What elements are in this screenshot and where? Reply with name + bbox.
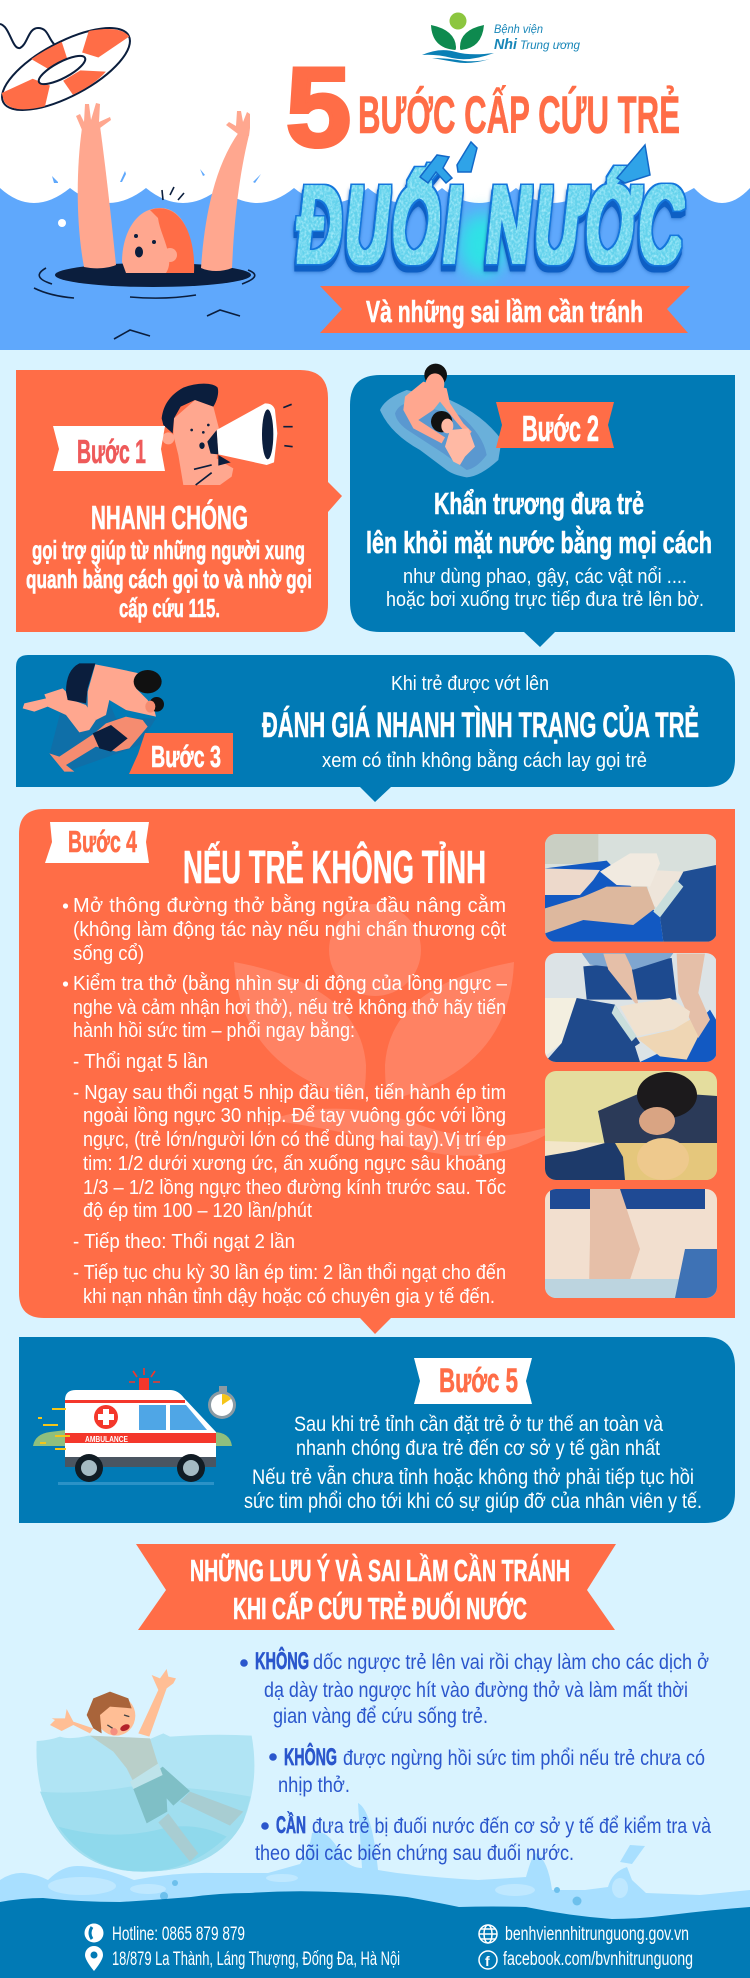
- step 4 instructions: ngực, (trẻ lớn/người lớn có thể dùng hai tay).Vị trí ép: [83, 1129, 506, 1151]
- step 4 instructions: (không làm động tác này nếu nghi chấn thương cột: [73, 919, 506, 941]
- ground: [58, 1482, 214, 1485]
- icon: facebook: f: [485, 1953, 490, 1969]
- panel background: [16, 655, 735, 802]
- panel: step 5: [19, 1337, 735, 1523]
- photo 2: airway check: [545, 953, 716, 1062]
- panel: step 3: [16, 655, 735, 802]
- note 2: [269, 1743, 705, 1797]
- step label: [129, 733, 233, 774]
- step 2 heading: [366, 486, 712, 560]
- illustration: rescuer and child in water: [380, 364, 502, 477]
- step 4 instructions: Mở thông đường thở bằng ngửa đầu nâng cằm: [73, 894, 506, 917]
- logo: Nhi: [494, 36, 518, 53]
- bushes: [33, 1430, 232, 1446]
- splash highlights: [48, 1874, 628, 1898]
- right hand: [226, 111, 250, 136]
- notes text: [240, 1647, 711, 1865]
- icon: facebook: [479, 1951, 497, 1969]
- panel: step 2: [350, 364, 735, 647]
- note 3: theo dõi các biến chứng sau đuối nước.: [255, 1842, 574, 1865]
- illustration: ambulance: [33, 1368, 236, 1485]
- step 4 instructions: khi nạn nhân tỉnh dậy hoặc có chuyên gia y tế đến.: [83, 1286, 495, 1308]
- stripes: [65, 1400, 185, 1403]
- icon: pin: [85, 1946, 103, 1971]
- speed lines: [38, 1409, 70, 1449]
- boy face: [107, 1715, 131, 1735]
- hair: [150, 208, 194, 273]
- panel background: [16, 370, 342, 632]
- title glow: [458, 213, 506, 277]
- step label: Bước 1: [77, 433, 146, 470]
- step 2 text: hoặc bơi xuống trực tiếp đưa trẻ lên bờ.: [386, 588, 704, 611]
- step label: [496, 402, 614, 449]
- step 1 text: [26, 535, 312, 623]
- left hand: [76, 103, 111, 130]
- icon: lifebuoy with rope: [0, 12, 141, 126]
- step 1 text: gọi trợ giúp từ những người xung: [32, 535, 305, 565]
- ripples: [34, 187, 255, 339]
- panel background: [19, 1337, 735, 1523]
- panel background: [19, 809, 735, 1334]
- illustration: drowning boy in water: [36, 1669, 254, 1872]
- panel background: [350, 375, 735, 647]
- step 4 instructions: nghe và cảm nhận hơi thở), nếu trẻ không thở hãy tiến: [73, 997, 506, 1019]
- step 5 text: [244, 1412, 702, 1513]
- header section: [0, 0, 750, 350]
- logo text: Bệnh viện: [494, 22, 543, 36]
- panel: step 4: [19, 809, 735, 1334]
- title ice accents: [420, 142, 650, 183]
- boy hair: [87, 1692, 132, 1733]
- step 1 text: cấp cứu 115.: [119, 593, 220, 623]
- boy arms: [50, 1669, 176, 1737]
- footer water splash: [0, 1803, 750, 1978]
- logo: Trung ương: [520, 38, 580, 52]
- note 2: nhịp thở.: [278, 1774, 350, 1797]
- step 4 instructions: 1/3 – 1/2 lồng ngực theo đường kính trước sau. Tốc: [83, 1177, 506, 1199]
- ribbon heading: mistakes to avoid: [136, 1544, 616, 1630]
- step 5 text: nhanh chóng đưa trẻ đến cơ sở y tế gần nhất: [296, 1436, 660, 1460]
- title number 5: 5: [286, 45, 351, 170]
- step 3 text: xem có tỉnh không bằng cách lay gọi trẻ: [322, 749, 647, 772]
- step label: Bước 2: [522, 408, 599, 449]
- hotline: Hotline: 0865 879 879: [112, 1924, 245, 1945]
- step 5 text: Sau khi trẻ tỉnh cần đặt trẻ ở tư thế an toàn và: [294, 1412, 663, 1436]
- footer: [0, 1891, 750, 1978]
- head: [122, 208, 194, 273]
- splash drops: [160, 1845, 645, 1906]
- step 4 instructions: tim: 1/2 dưới xương ức, ấn xuống ngực sâu khoảng: [83, 1153, 506, 1175]
- ribbon text: [190, 1552, 570, 1626]
- note 1: KHÔNG: [255, 1647, 309, 1675]
- step 4 heading: NẾU TRẺ KHÔNG TỈNH: [183, 841, 486, 893]
- cross: [94, 1405, 118, 1429]
- step 4 instructions: - Ngay sau thổi ngạt 5 nhịp đầu tiên, tiến hành ép tim: [73, 1082, 506, 1104]
- note 3: [255, 1811, 711, 1865]
- step label: Bước 5: [439, 1362, 518, 1400]
- facebook: facebook.com/bvnhitrunguong: [503, 1949, 693, 1970]
- step 4 instructions: Kiểm tra thở (bằng nhìn sự di động của lồng ngực –: [73, 972, 508, 995]
- ribbon shape: [320, 286, 690, 333]
- step label: [414, 1358, 532, 1404]
- header blue wave background: [0, 188, 750, 350]
- deepest water: [58, 1826, 227, 1872]
- note 1: [240, 1647, 709, 1728]
- icon: man with megaphone: [162, 384, 293, 485]
- header white background: [0, 0, 750, 350]
- watermark logo: [234, 904, 570, 1156]
- step label: [45, 822, 149, 863]
- water hole: [55, 263, 251, 287]
- subtitle ribbon: [320, 286, 690, 333]
- right arm: [201, 132, 249, 271]
- step 2 heading: Khẩn trương đưa trẻ: [434, 486, 644, 521]
- panel: step 1: [16, 370, 342, 632]
- step label: Bước 3: [151, 739, 221, 774]
- deeper water: [40, 1786, 251, 1872]
- step 4 instructions: - Thổi ngạt 5 lần: [73, 1051, 208, 1073]
- photo 3: rescue breaths: [545, 1071, 717, 1180]
- logo: [422, 12, 580, 63]
- water bowl: [36, 1733, 254, 1872]
- step 1 text: quanh bằng cách gọi to và nhờ gọi: [26, 564, 312, 594]
- note 1: dạ dày trào ngược hít vào đường thở và làm mất thời: [264, 1679, 688, 1702]
- left arm: [78, 126, 116, 268]
- footer wave: [0, 1891, 750, 1978]
- icon: phone: [84, 1924, 104, 1942]
- website: benhviennhitrunguong.gov.vn: [505, 1924, 689, 1945]
- photo 4: chest compression: [545, 1189, 717, 1299]
- address: 18/879 La Thành, Láng Thượng, Đống Đa, Hà Nội: [112, 1949, 400, 1970]
- body: [65, 1390, 216, 1467]
- boy body: [90, 1736, 243, 1862]
- ribbon shape: [136, 1544, 616, 1630]
- icon: globe: [479, 1925, 497, 1943]
- note 1: gian vàng để cứu sống trẻ.: [273, 1705, 488, 1728]
- title line 2: ĐUỐI NƯỚC: [298, 166, 687, 285]
- step 4 instructions: - Tiếp tục chu kỳ 30 lần ép tim: 2 lần thổi ngạt cho đến: [73, 1262, 506, 1284]
- step label: Bước 4: [68, 824, 137, 859]
- water drops: [52, 169, 261, 183]
- step 1 heading: NHANH CHÓNG: [91, 499, 248, 536]
- logo mark: [422, 12, 494, 63]
- step label: [53, 426, 165, 471]
- step 3 intro: Khi trẻ được vớt lên: [391, 672, 549, 695]
- boy head: [97, 1696, 135, 1736]
- face details: [134, 234, 177, 262]
- step 4 instructions: - Tiếp theo: Thổi ngạt 2 lần: [73, 1231, 295, 1253]
- step 2 text: [386, 565, 704, 611]
- step 4 instructions: ngoài lồng ngực 30 nhịp. Để tay vuông góc với lồng: [83, 1105, 506, 1127]
- step 4 instructions: độ ép tim 100 – 120 lần/phút: [83, 1200, 312, 1222]
- windows: [139, 1405, 207, 1430]
- stopwatch: [208, 1386, 236, 1419]
- illustration: rescuer checking child: [23, 663, 164, 772]
- illustration: drowning child: [34, 103, 261, 339]
- photo 1: head tilt: [545, 834, 716, 942]
- step 4 instructions: [63, 894, 508, 1308]
- wheels: [75, 1454, 205, 1482]
- step 2 text: như dùng phao, gậy, các vật nổi ....: [403, 565, 687, 588]
- light water: [0, 1803, 750, 1978]
- step 4 instructions: sống cổ): [73, 943, 144, 965]
- ribbon text: KHI CẤP CỨU TRẺ ĐUỐI NƯỚC: [233, 1590, 527, 1626]
- white drop: [58, 219, 66, 227]
- ambulance label: AMBULANCE: [85, 1435, 129, 1444]
- beacon: [129, 1368, 160, 1390]
- note 2: KHÔNG: [284, 1743, 337, 1771]
- note 3: CẦN: [276, 1811, 306, 1839]
- step 4 instructions: hành hồi sức tim – phổi ngay bằng:: [73, 1019, 355, 1042]
